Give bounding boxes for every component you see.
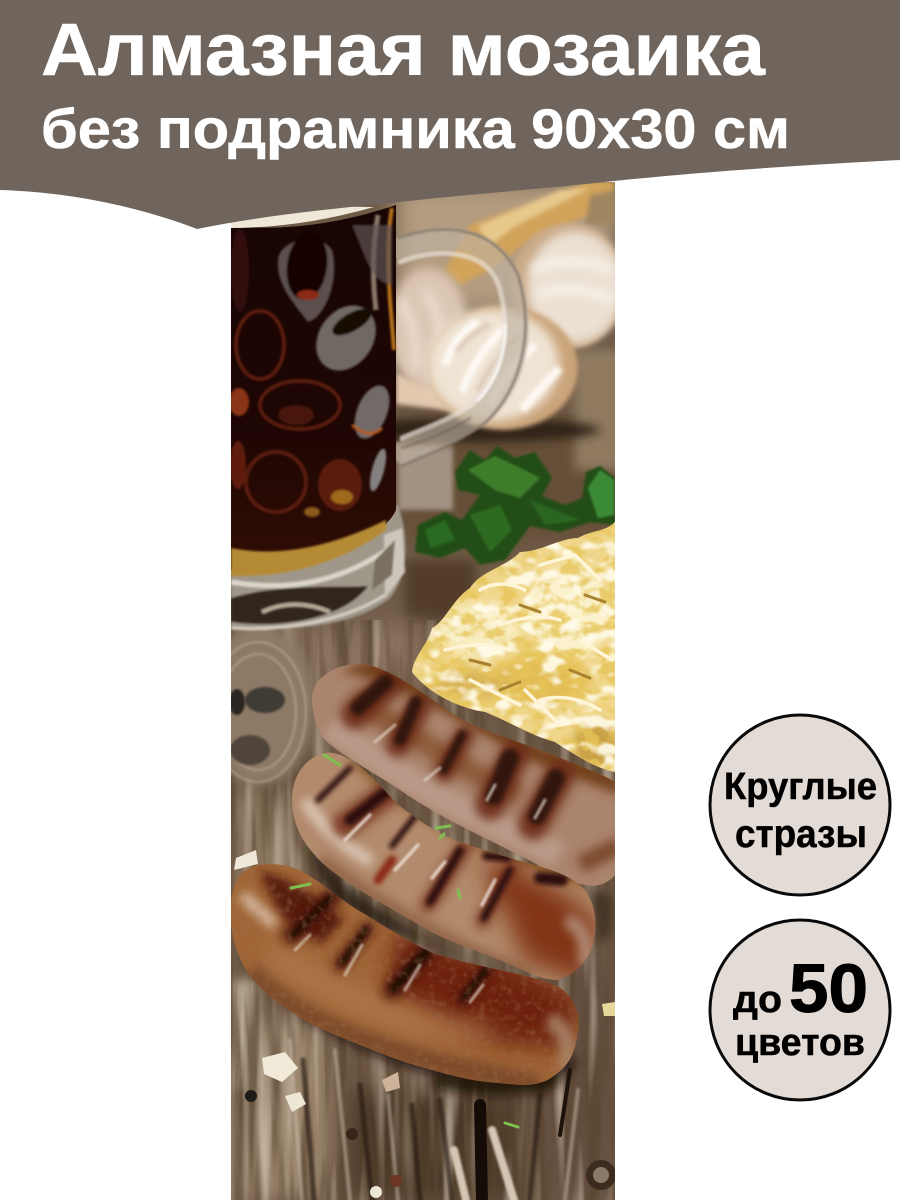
- title line 2: без подрамника 90х30 см: [41, 97, 790, 160]
- badge word цветов: цветов: [735, 1022, 865, 1064]
- glass base: [231, 505, 406, 629]
- sausage 3: [225, 855, 585, 1090]
- badge text line 2: стразы: [735, 813, 867, 856]
- badge text line 1: Круглые: [724, 766, 877, 808]
- glass mug handle: [398, 230, 525, 466]
- amber bottom band: [231, 520, 386, 576]
- chives: [291, 755, 518, 1127]
- sausage 1: [312, 664, 615, 886]
- garlic and peppercorns: [234, 850, 615, 1198]
- badge: round rhinestones: [710, 715, 890, 895]
- wood knot: [231, 629, 314, 788]
- photo: beer, onions, sauerkraut and grilled sausages on wood: [231, 182, 615, 1200]
- grill mark glow: [345, 790, 512, 922]
- sauerkraut: [405, 520, 620, 780]
- sausage shadows: [240, 830, 612, 1095]
- parsnip: [445, 180, 615, 285]
- sausage 2: [292, 752, 596, 980]
- sausage skin speckle: [238, 866, 578, 1082]
- foam: [231, 205, 374, 228]
- dark beer: [231, 205, 396, 570]
- grill mark glow: [355, 682, 560, 825]
- grill mark glow: [292, 897, 488, 1000]
- badge word до: до: [733, 979, 782, 1021]
- header banner: [0, 0, 900, 229]
- wood planks and cracks: [290, 1040, 616, 1200]
- onions: [388, 223, 625, 430]
- parsley: [415, 446, 615, 565]
- dimple reflections: [229, 208, 396, 517]
- beer mug: [229, 205, 406, 629]
- title: [41, 8, 790, 160]
- badge: up to 50 colours: [710, 920, 890, 1100]
- wooden table background: [231, 182, 635, 1200]
- title line 1: Алмазная мозаика: [41, 8, 766, 91]
- grill marks: [358, 682, 556, 816]
- badge number 50: 50: [789, 950, 868, 1027]
